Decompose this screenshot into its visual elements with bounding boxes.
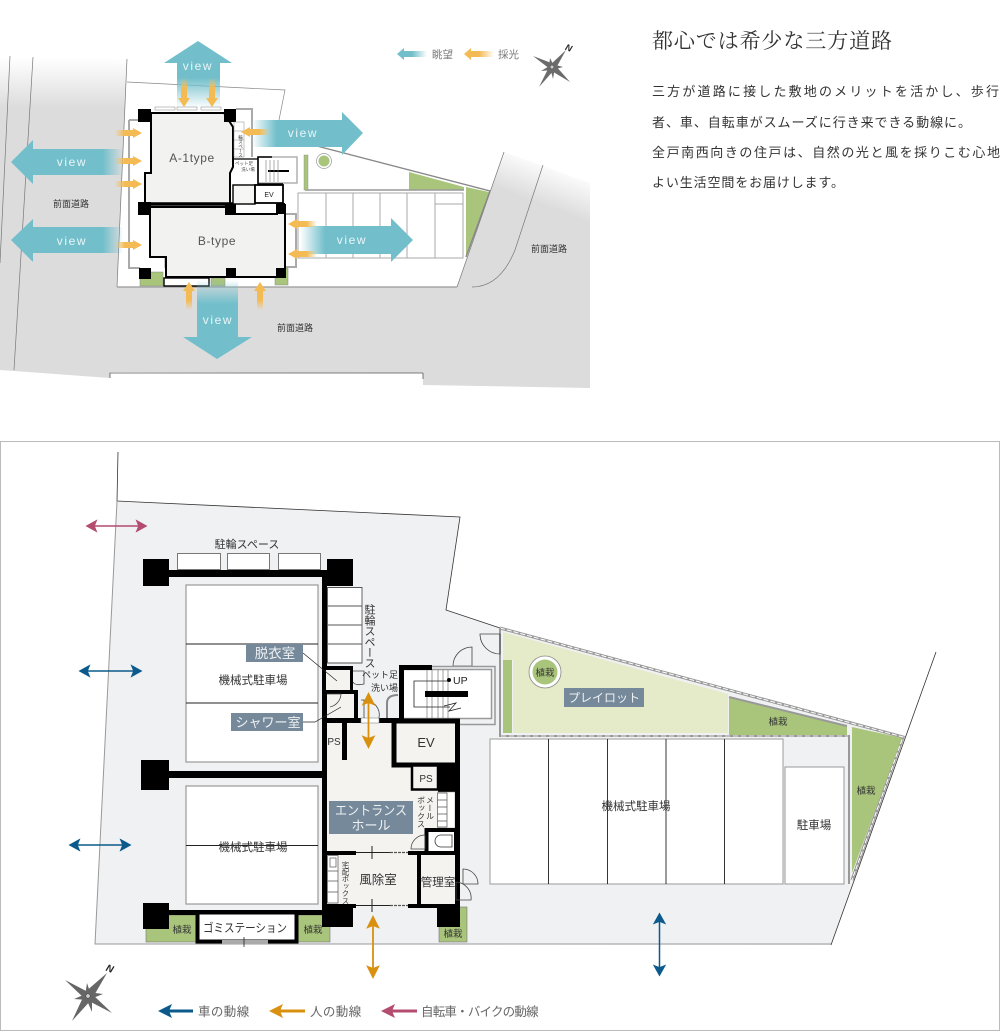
callout: changing room: 脱衣室	[255, 646, 295, 661]
south planting and garbage station: ゴミステーション	[203, 920, 287, 935]
outdoor mechanical parking: 機械式駐車場	[602, 799, 671, 813]
bicycle space top	[178, 537, 320, 570]
arrow: view west lower	[11, 219, 123, 262]
label: mail box: メール	[426, 796, 434, 820]
label: playlot	[564, 688, 644, 707]
label: playlot: プレイロット	[568, 691, 640, 705]
elevator: EV	[417, 735, 435, 750]
garage mechanical parking south: 機械式駐車場	[218, 840, 288, 854]
arrow: car route west lower	[70, 840, 130, 850]
text block: description: よい生活空間をお届けします。	[652, 175, 844, 190]
legend item: bicycle and bike route	[381, 1004, 539, 1019]
arrow: view west upper: view	[57, 155, 87, 169]
bicycle space side: 駐輪スペース	[363, 603, 376, 668]
outdoor parking and planting	[298, 145, 490, 258]
arrow: pedestrian route entrance hall	[364, 694, 374, 747]
icon: compass north arrow	[533, 42, 574, 87]
toilet	[411, 830, 456, 851]
bicycle space side	[328, 588, 376, 668]
outdoor parking space: 駐車場	[797, 818, 832, 832]
arrow: car route west upper	[80, 666, 141, 676]
label: planting near playlot: 植栽	[535, 667, 555, 679]
label: front road east: 前面道路	[531, 243, 567, 254]
label: office: 管理室	[421, 875, 455, 889]
B-type unit	[150, 205, 285, 277]
label: planting middle: 植栽	[768, 716, 788, 728]
core: elevator and stairs: EV	[264, 192, 274, 199]
text block: description: 全戸南西向きの住戸は、自然の光と風を採りこむ心地	[652, 145, 1000, 160]
arrow: view west lower: view	[57, 234, 87, 248]
A-1 type unit	[145, 113, 233, 204]
PS and mail core	[412, 763, 460, 908]
label: ペット足洗い場: 洗い場	[371, 682, 398, 693]
planting areas	[500, 628, 902, 884]
legend item: car route: 車の動線	[198, 1004, 250, 1019]
garage mechanical parking south	[186, 786, 318, 904]
arrow: view south: view	[203, 313, 233, 327]
stairs	[402, 666, 495, 724]
arrow: view east lower: view	[337, 233, 367, 247]
callout: changing room	[246, 644, 337, 681]
label: front road south: 前面道路	[277, 322, 313, 333]
arrow: view north: view	[183, 59, 213, 73]
A-1 type unit: A-1type	[169, 151, 215, 165]
south planting and garbage station: 植栽	[303, 924, 323, 936]
legend item: car route	[158, 1004, 250, 1019]
entrance hall and core	[326, 666, 460, 907]
text block: description: 三方が道路に接した敷地のメリットを活かし、歩行	[652, 84, 999, 99]
outdoor mechanical parking	[490, 739, 783, 884]
label: ペット足洗い場	[362, 670, 398, 693]
south planting and garbage station: 植栽	[443, 928, 463, 940]
core: elevator and stairs: 輪スペース	[238, 134, 244, 158]
arrow: view east upper	[252, 112, 363, 155]
panel: site orientation plan	[0, 41, 592, 388]
core: elevator and stairs: ペット足	[235, 161, 253, 167]
label: planting east: 植栽	[856, 785, 876, 797]
label: front road west: 前面道路	[53, 198, 89, 209]
icon: compass north arrow: N	[564, 42, 574, 54]
daylight arrows	[115, 78, 317, 310]
core: elevator and stairs: 洗い場	[241, 166, 255, 173]
arrow: car route south	[654, 914, 664, 975]
arrow: view north	[164, 41, 232, 108]
label: mail box	[416, 796, 434, 828]
garage structure walls	[141, 559, 353, 907]
icon: compass north arrow: N	[104, 963, 115, 976]
core: elevator and stairs	[233, 122, 297, 204]
legend: circulation routes	[158, 1004, 539, 1019]
callout: shower room	[231, 707, 341, 731]
label: ペット足洗い場: ペット足	[362, 670, 398, 680]
callout: entrance hall	[329, 801, 413, 834]
windbreak room and office walls	[326, 846, 471, 912]
site boundary	[95, 452, 936, 945]
label: mail box: ボックス	[416, 796, 426, 828]
arrow: view east lower	[300, 218, 413, 262]
garage mechanical parking north: 機械式駐車場	[218, 673, 288, 687]
arrow: pedestrian route street	[368, 917, 378, 977]
legend item: bicycle and bike route: 自転車・バイクの動線	[421, 1004, 539, 1019]
doors near stairs	[453, 634, 500, 884]
south planting and garbage station	[143, 903, 467, 947]
roads around the site	[0, 50, 592, 388]
arrow: view west upper	[11, 140, 123, 184]
label: PS west: PS	[327, 737, 341, 748]
elevator	[394, 721, 460, 765]
label: delivery box: 宅配ボックス	[342, 861, 350, 904]
arrow: view east upper: view	[288, 126, 318, 140]
label: windbreak room: 風除室	[359, 873, 397, 887]
garage mechanical parking north	[186, 585, 318, 762]
legend item: pedestrian route	[269, 1004, 362, 1019]
text block: description	[652, 84, 1000, 190]
B-type unit: B-type	[198, 234, 236, 248]
arrow: view south	[183, 280, 252, 359]
panel: ground floor plan	[0, 442, 1000, 1030]
callout: entrance hall: ホール	[351, 818, 391, 833]
arrow: bicycle route	[87, 521, 146, 531]
callout: entrance hall: エントランス	[335, 803, 407, 818]
outdoor parking space	[785, 767, 844, 884]
PS and mail core: PS	[419, 774, 433, 785]
legend: view and daylight: 採光	[498, 48, 519, 61]
legend: view and daylight: 眺望	[432, 48, 453, 61]
legend item: pedestrian route: 人の動線	[310, 1004, 362, 1019]
building plan	[129, 107, 297, 286]
legend: view and daylight	[397, 48, 519, 61]
callout: shower room: シャワー室	[235, 715, 301, 730]
bicycle space top: 駐輪スペース	[215, 537, 279, 551]
south planting and garbage station: 植栽	[172, 924, 192, 936]
heading: 都心では希少な三方道路	[652, 29, 892, 53]
text block: description: 者、車、自転車がスムーズに行き来できる動線に。	[652, 115, 971, 130]
stairs: UP	[453, 675, 468, 687]
icon: compass north arrow	[65, 963, 115, 1021]
